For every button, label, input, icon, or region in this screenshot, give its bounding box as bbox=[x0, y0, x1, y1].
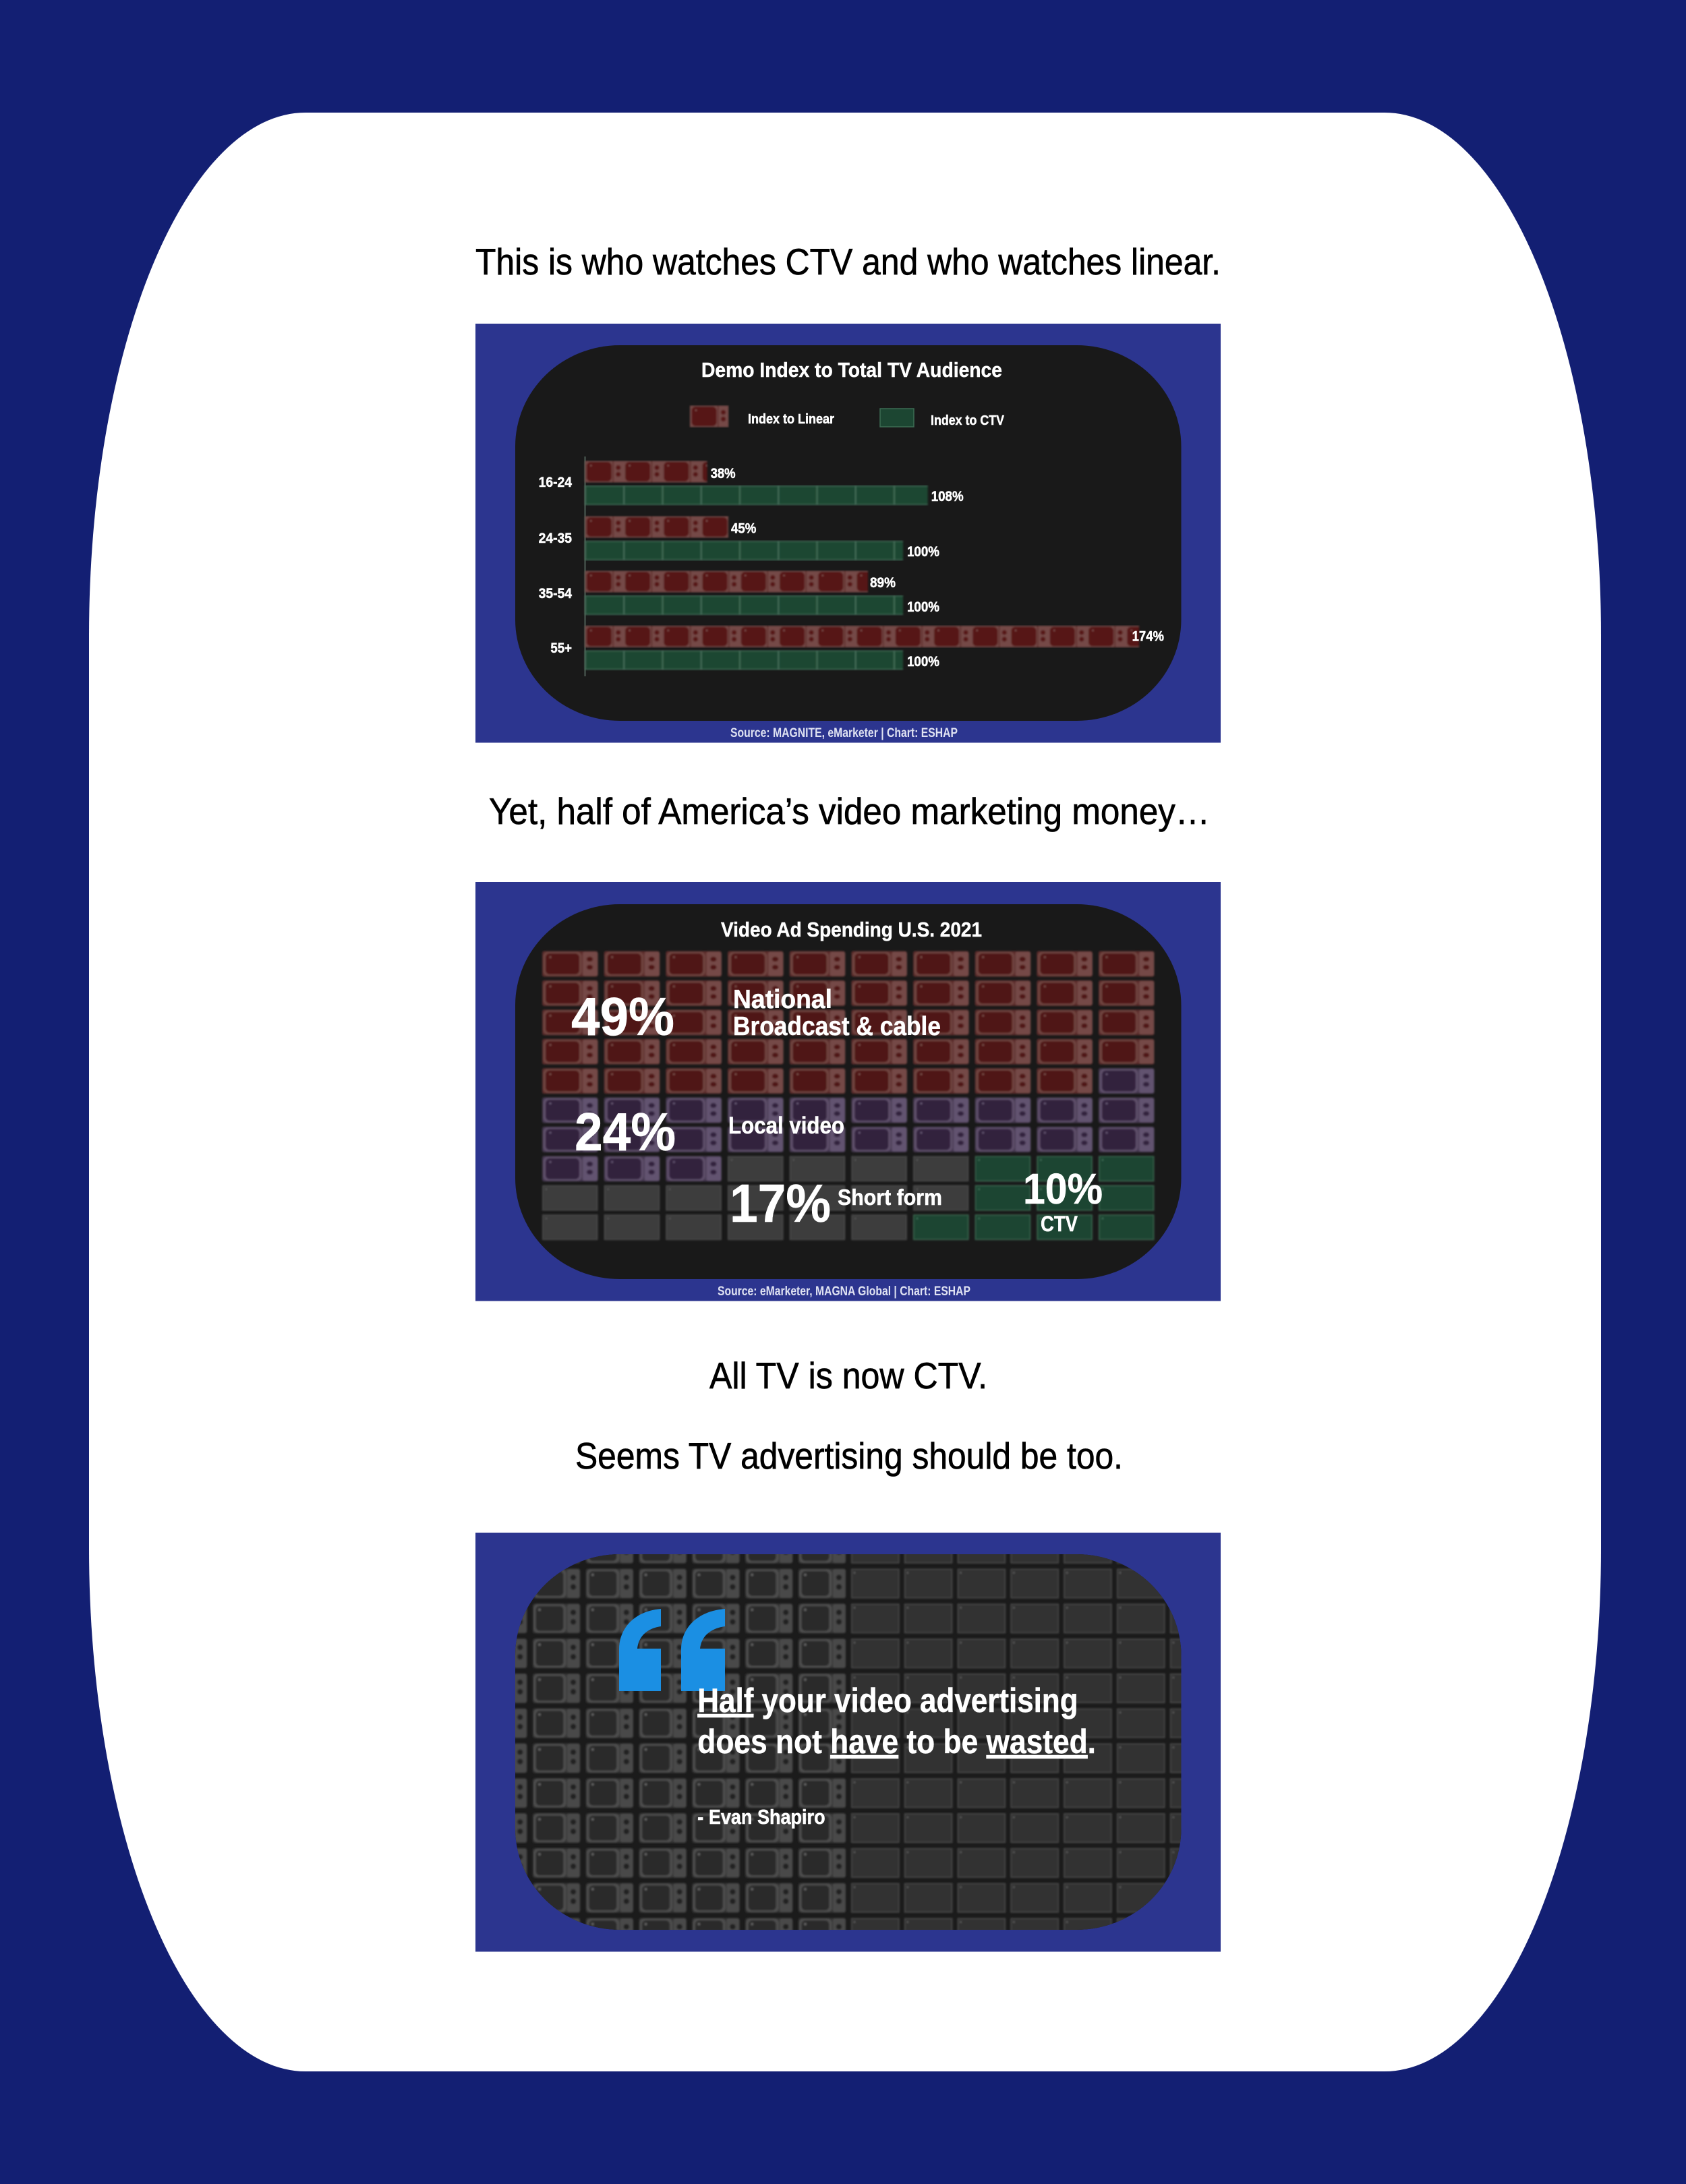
TV wall background bbox=[515, 1554, 1182, 1930]
panel: video ad spending bbox=[475, 882, 1221, 1301]
source line: Source: eMarketer, MAGNA Global | Chart: ESHAP bbox=[718, 1285, 970, 1299]
panel: demo index chart bbox=[475, 324, 1221, 743]
label: 17% short form: Short form bbox=[838, 1185, 942, 1210]
heading: who watches CTV and linear: This is who watches CTV and who watches linear. bbox=[475, 241, 1221, 283]
heading: all TV is now CTV: All TV is now CTV. bbox=[709, 1355, 987, 1396]
label: 49% national broadcast and cable: Broadcast & cable bbox=[733, 1012, 941, 1041]
waffle chart: 100 TV cells bbox=[542, 951, 1155, 1240]
row 35-54 bbox=[539, 570, 939, 615]
row 16-24 bbox=[539, 461, 964, 505]
legend bbox=[690, 406, 1005, 428]
row 24-35: 45% bbox=[731, 521, 757, 537]
quote text: does not have to be wasted. bbox=[697, 1723, 1096, 1761]
label: 17% short form bbox=[730, 1173, 942, 1233]
row 16-24: 38% bbox=[711, 466, 736, 481]
row 35-54: 35-54 bbox=[539, 586, 572, 601]
label: 10% CTV: 10% bbox=[1023, 1164, 1103, 1213]
label: 49% national broadcast and cable bbox=[571, 985, 941, 1046]
legend: Index to Linear bbox=[748, 412, 834, 427]
label: 10% CTV: CTV bbox=[1041, 1212, 1078, 1236]
row 55+: 100% bbox=[907, 654, 939, 670]
chart title: Video Ad Spending U.S. 2021 bbox=[721, 918, 982, 941]
quote text bbox=[697, 1682, 1096, 1761]
row 24-35: 24-35 bbox=[539, 531, 572, 546]
row 16-24: 108% bbox=[931, 489, 964, 504]
label: 24% local video bbox=[575, 1102, 844, 1162]
label: 49% national broadcast and cable: 49% bbox=[571, 986, 674, 1046]
label: 17% short form: 17% bbox=[730, 1173, 831, 1233]
chart title: Demo Index to Total TV Audience bbox=[701, 358, 1002, 382]
label: 10% CTV bbox=[1023, 1164, 1103, 1236]
row 24-35: 100% bbox=[907, 544, 939, 560]
row 16-24: 16-24 bbox=[539, 475, 572, 490]
row 55+: 55+ bbox=[550, 641, 572, 656]
icon: quotation marks bbox=[619, 1609, 725, 1691]
heading: TV advertising should be too: Seems TV advertising should be too. bbox=[575, 1435, 1123, 1477]
label: 24% local video: Local video bbox=[728, 1113, 844, 1139]
label: 49% national broadcast and cable: National bbox=[733, 985, 832, 1014]
quote attribution: - Evan Shapiro bbox=[697, 1805, 825, 1829]
row 24-35 bbox=[539, 517, 939, 560]
row 35-54: 89% bbox=[870, 575, 896, 591]
heading: half of video marketing money: Yet, half of America’s video marketing money… bbox=[489, 790, 1210, 832]
source line: Source: MAGNITE, eMarketer | Chart: ESHAP bbox=[730, 726, 958, 740]
legend: Index to CTV bbox=[931, 413, 1005, 428]
label: 24% local video: 24% bbox=[575, 1102, 676, 1162]
quote text: Half your video advertising bbox=[697, 1682, 1078, 1719]
row 55+ bbox=[550, 626, 1164, 670]
row 55+: 174% bbox=[1132, 628, 1164, 645]
bar chart: index by age group bbox=[539, 456, 1164, 676]
panel: quote bbox=[475, 1533, 1221, 1951]
row 35-54: 100% bbox=[907, 599, 939, 615]
